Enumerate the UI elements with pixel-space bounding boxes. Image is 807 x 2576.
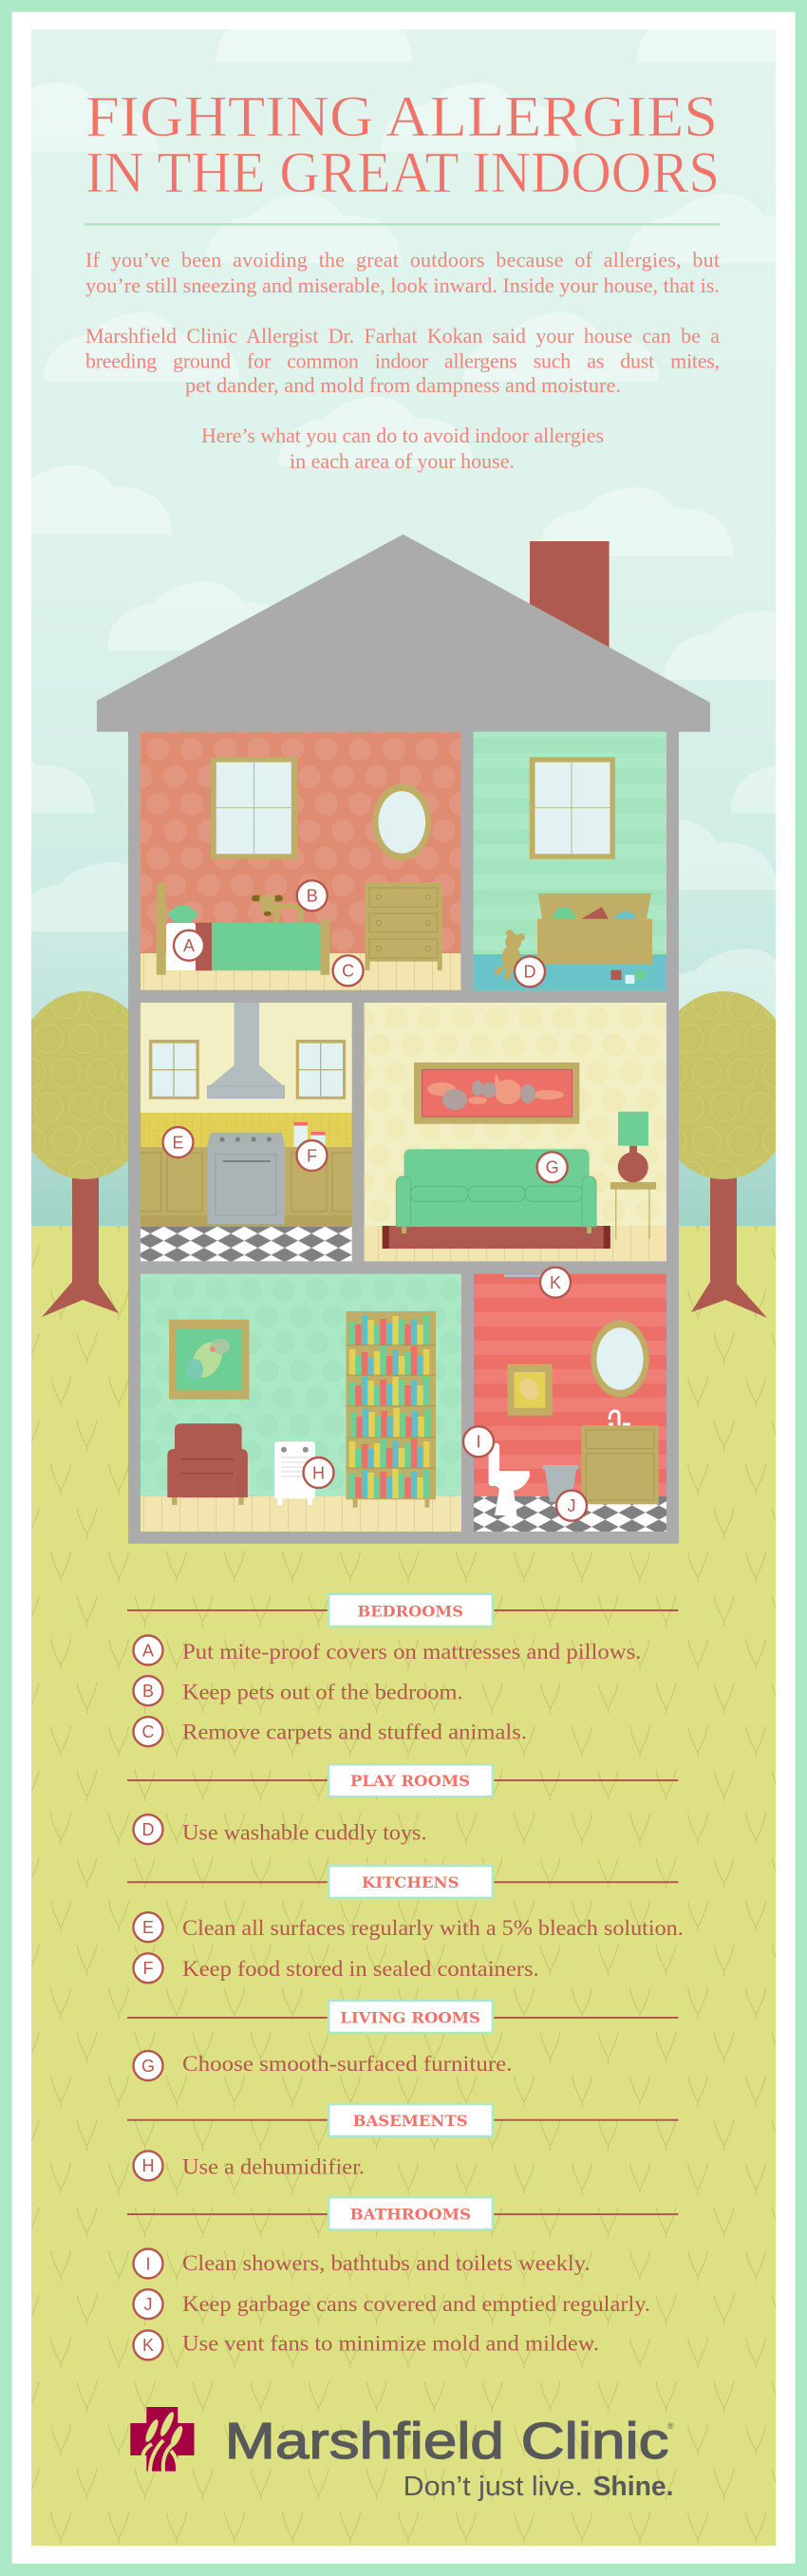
- item D: [133, 1814, 427, 1844]
- item K: [133, 2330, 599, 2360]
- cabinet doors: [141, 1153, 352, 1212]
- item C: C: [142, 1722, 154, 1741]
- side table: [610, 1182, 656, 1239]
- marker C: [333, 955, 364, 986]
- room: kitchen: [141, 1003, 352, 1261]
- item B: [133, 1676, 463, 1705]
- section: bedrooms: [127, 1594, 678, 1746]
- item H: H: [142, 2156, 154, 2175]
- bed: [157, 882, 329, 975]
- section: play rooms: [127, 1764, 678, 1844]
- marker A: [174, 931, 204, 961]
- marker H: H: [312, 1463, 325, 1482]
- range hood: [207, 1003, 285, 1099]
- chimney: [530, 541, 610, 648]
- marker D: [515, 956, 545, 987]
- item C: Remove carpets and stuffed animals.: [182, 1720, 527, 1743]
- framed picture: [169, 1320, 249, 1400]
- item G: [133, 2051, 513, 2080]
- marker A: A: [183, 936, 195, 955]
- item E: Clean all surfaces regularly with a 5% bleach solution.: [182, 1916, 684, 1940]
- intro text: in each area of your house.: [290, 449, 515, 473]
- oval mirror: [372, 783, 431, 861]
- section: play rooms: PLAY ROOMS: [350, 1772, 470, 1790]
- oval mirror: [591, 1320, 649, 1398]
- item I: Clean showers, bathtubs and toilets weekly.: [182, 2251, 591, 2275]
- item D: Use washable cuddly toys.: [182, 1820, 427, 1844]
- abstract painting: [414, 1062, 579, 1124]
- left tree: [31, 991, 128, 1317]
- section: basements: [127, 2104, 678, 2180]
- item A: A: [142, 1641, 154, 1660]
- item A: Put mite-proof covers on mattresses and pillows.: [182, 1640, 642, 1664]
- title: IN THE GREAT INDOORS: [85, 141, 720, 205]
- room: bathroom: [463, 1268, 666, 1532]
- marker J: [556, 1491, 587, 1521]
- intro text: [85, 248, 720, 473]
- window: [530, 757, 615, 859]
- marker B: [297, 880, 328, 911]
- item E: E: [142, 1918, 154, 1937]
- item A: [133, 1635, 642, 1665]
- logo: marshfield clinic cross: [130, 2407, 194, 2472]
- item F: [133, 1953, 539, 1983]
- section: bedrooms: BEDROOMS: [357, 1602, 463, 1620]
- marker B: B: [307, 887, 318, 906]
- room: play room: [474, 732, 666, 990]
- room: living room: [365, 1003, 666, 1261]
- item E: [133, 1912, 684, 1942]
- tagline: Shine.: [592, 2472, 674, 2502]
- marker I: I: [476, 1433, 481, 1452]
- kitchen windows: [149, 1040, 346, 1100]
- teddy bear: [493, 930, 525, 982]
- item K: K: [142, 2336, 154, 2355]
- marker F: [296, 1140, 327, 1171]
- item H: [133, 2151, 365, 2180]
- marker D: D: [524, 963, 535, 982]
- item G: Choose smooth-surfaced furniture.: [182, 2052, 513, 2076]
- sofa: [396, 1149, 596, 1233]
- marker I: [463, 1426, 494, 1457]
- marker F: F: [307, 1146, 317, 1165]
- toy blocks: [610, 970, 646, 984]
- sink faucet: [609, 1411, 630, 1425]
- section: living rooms: LIVING ROOMS: [340, 2009, 480, 2026]
- item J: [133, 2289, 650, 2319]
- marker E: [163, 1127, 194, 1157]
- title: FIGHTING ALLERGIES: [85, 85, 718, 149]
- stove: [207, 1133, 285, 1224]
- item F: Keep food stored in sealed containers.: [182, 1957, 539, 1981]
- intro text: breeding ground for common indoor allergens such as dust mites,: [85, 349, 720, 372]
- intro text: If you’ve been avoiding the great outdoors because of allergies, but: [85, 248, 720, 272]
- intro text: pet dander, and mold from dampness and moisture.: [185, 373, 621, 397]
- section: bathrooms: [127, 2197, 678, 2360]
- intro text: Marshfield Clinic Allergist Dr. Farhat Kokan said your house can be a: [85, 324, 720, 348]
- marker K: K: [550, 1273, 561, 1292]
- logo: marshfield clinic wordmark: Marshfield Clinic: [225, 2413, 669, 2470]
- sky background: [31, 29, 776, 1226]
- roof: [97, 535, 710, 732]
- tagline: Don’t just live.: [404, 2472, 583, 2502]
- item B: B: [142, 1682, 154, 1701]
- intro text: you’re still sneezing and miserable, look inward. Inside your house, that is.: [85, 273, 720, 297]
- vanity cabinet: [581, 1425, 659, 1504]
- item D: D: [142, 1820, 154, 1839]
- marker G: G: [546, 1158, 559, 1177]
- section: kitchens: KITCHENS: [362, 1873, 460, 1891]
- grass field: [31, 1226, 776, 2546]
- item I: I: [145, 2254, 151, 2273]
- marker H: [304, 1457, 334, 1488]
- item B: Keep pets out of the bedroom.: [182, 1680, 463, 1703]
- house walls: [128, 731, 679, 1544]
- section: kitchens: [127, 1866, 684, 1983]
- marker E: E: [172, 1133, 184, 1152]
- toy chest: [537, 893, 652, 965]
- marker K: [540, 1268, 571, 1298]
- title: [85, 85, 720, 205]
- tagline: [404, 2472, 674, 2502]
- pillow: [167, 905, 198, 924]
- food containers: [294, 1122, 326, 1147]
- dehumidifier: [274, 1441, 315, 1505]
- bookshelf: [346, 1311, 436, 1508]
- title divider: [84, 223, 720, 226]
- lamp: [618, 1112, 648, 1182]
- item J: Keep garbage cans covered and emptied regularly.: [182, 2292, 650, 2316]
- item K: Use vent fans to minimize mold and mildew.: [182, 2331, 599, 2355]
- section: bathrooms: BATHROOMS: [350, 2205, 471, 2224]
- item G: G: [141, 2057, 155, 2076]
- item J: J: [144, 2295, 152, 2314]
- section: basements: BASEMENTS: [353, 2112, 468, 2130]
- item H: Use a dehumidifier.: [182, 2154, 365, 2178]
- item F: F: [142, 1959, 154, 1978]
- window: [211, 757, 297, 859]
- trash can: [543, 1465, 578, 1502]
- intro text: Here’s what you can do to avoid indoor allergies: [201, 423, 604, 447]
- marker C: C: [342, 962, 354, 981]
- room: bedroom: [141, 732, 460, 990]
- clouds: [0, 0, 807, 1018]
- framed picture: [507, 1364, 553, 1416]
- item I: [133, 2248, 591, 2279]
- dog: [252, 894, 303, 923]
- right tree: [679, 991, 776, 1318]
- dresser: [365, 882, 442, 970]
- room: basement: [141, 1274, 461, 1532]
- vent fan: [504, 1274, 543, 1277]
- section: living rooms: [127, 2001, 678, 2080]
- marker J: J: [568, 1496, 575, 1515]
- armchair: [167, 1423, 248, 1505]
- toilet: [489, 1443, 530, 1515]
- registered mark: ®: [667, 2421, 674, 2431]
- item C: [133, 1717, 527, 1746]
- rug: [383, 1226, 610, 1249]
- marker G: [537, 1152, 568, 1182]
